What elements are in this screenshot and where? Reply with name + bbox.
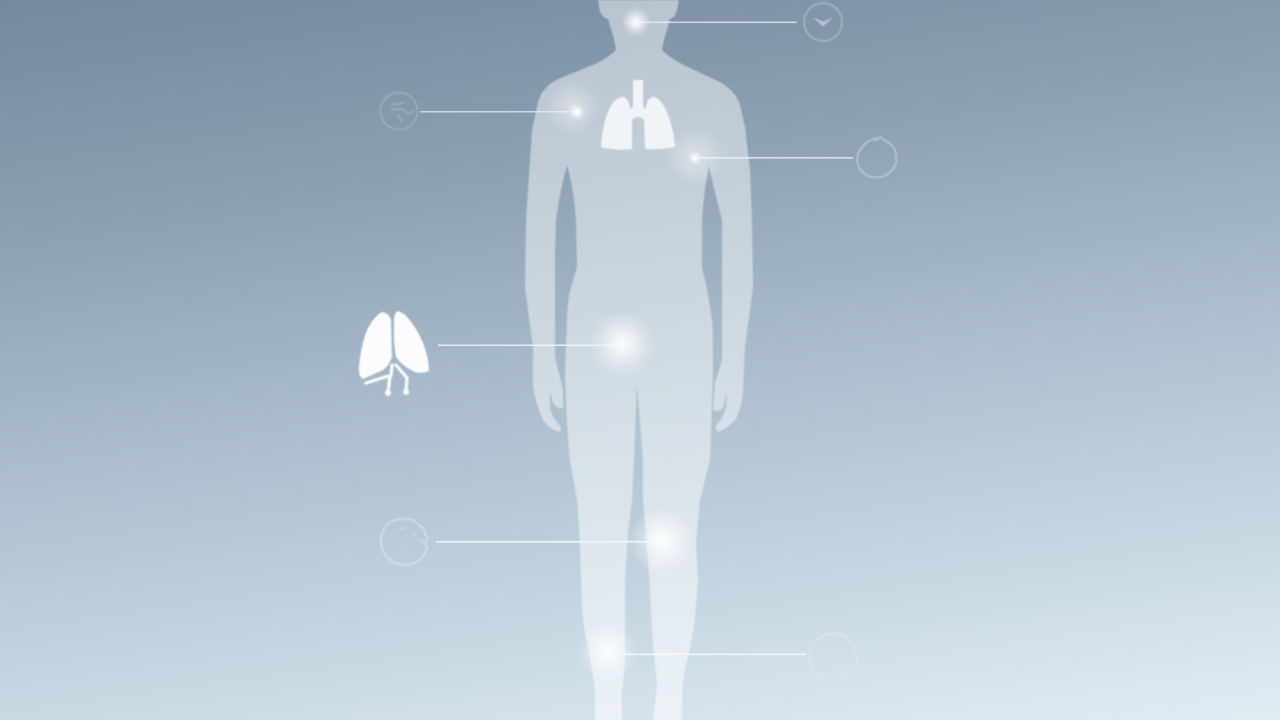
icon: throat circle with small chevron [804,3,842,41]
icon: shin faint circle [810,634,856,680]
connector line: left chest [420,111,575,112]
glow: throat [621,7,651,37]
icon: knee round organ [381,519,428,565]
glow: pelvis [588,310,656,378]
connector line: throat [636,22,797,23]
human body silhouette [525,0,753,720]
icon: central lungs [601,80,675,150]
connector line: knee [436,541,662,542]
icon: left chest circle with organ mark [380,92,418,130]
glow: left chest [545,80,601,136]
connector line: pelvis [438,344,622,346]
glow: knee [628,507,696,575]
connector line: shin [608,654,806,655]
connector line: right chest [695,157,853,159]
icon: large lungs with bronchi [359,311,429,396]
glow: right chest [665,127,725,187]
icon: right chest round organ [857,137,896,177]
glow: shin [578,622,638,682]
